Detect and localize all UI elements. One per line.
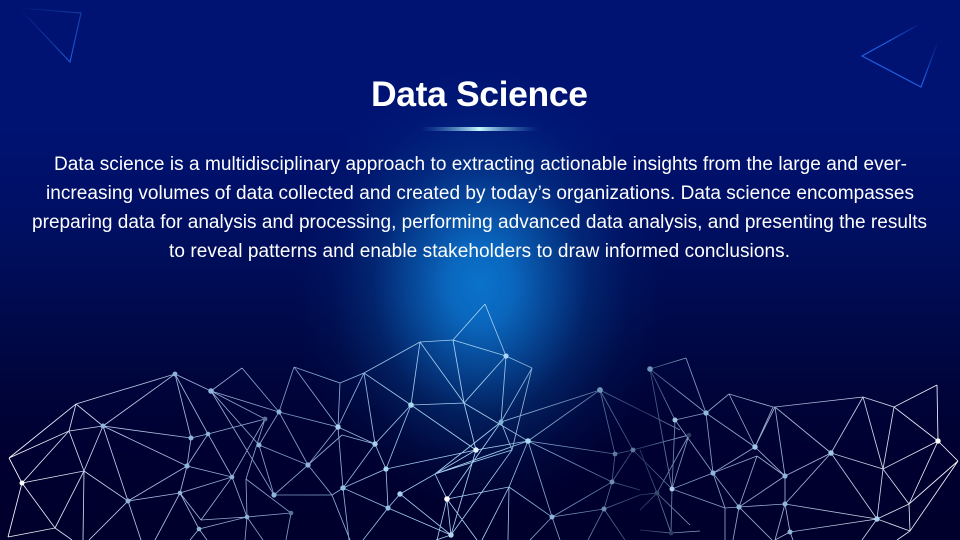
- body text: increasing volumes of data collected and created by today’s organizations. Data science encompasses: [46, 183, 914, 204]
- body text: to reveal patterns and enable stakeholders to draw informed conclusions.: [169, 241, 790, 262]
- network: polygon mesh: [8, 304, 958, 540]
- body text: preparing data for analysis and processing, performing advanced data analysis, and presenting the results: [32, 212, 927, 233]
- body text: Data science is a multidisciplinary approach to extracting actionable insights from the large and ever-: [54, 154, 907, 175]
- mesh center: [279, 304, 689, 540]
- mesh left: [8, 367, 332, 540]
- title underline: [421, 127, 538, 131]
- mesh nodes: [20, 353, 941, 538]
- mesh right: [640, 358, 958, 540]
- body text: [32, 154, 927, 262]
- icon: triangle top left: [19, 8, 81, 62]
- icon: triangle top right: [862, 25, 940, 87]
- title: Data Science: [371, 74, 588, 114]
